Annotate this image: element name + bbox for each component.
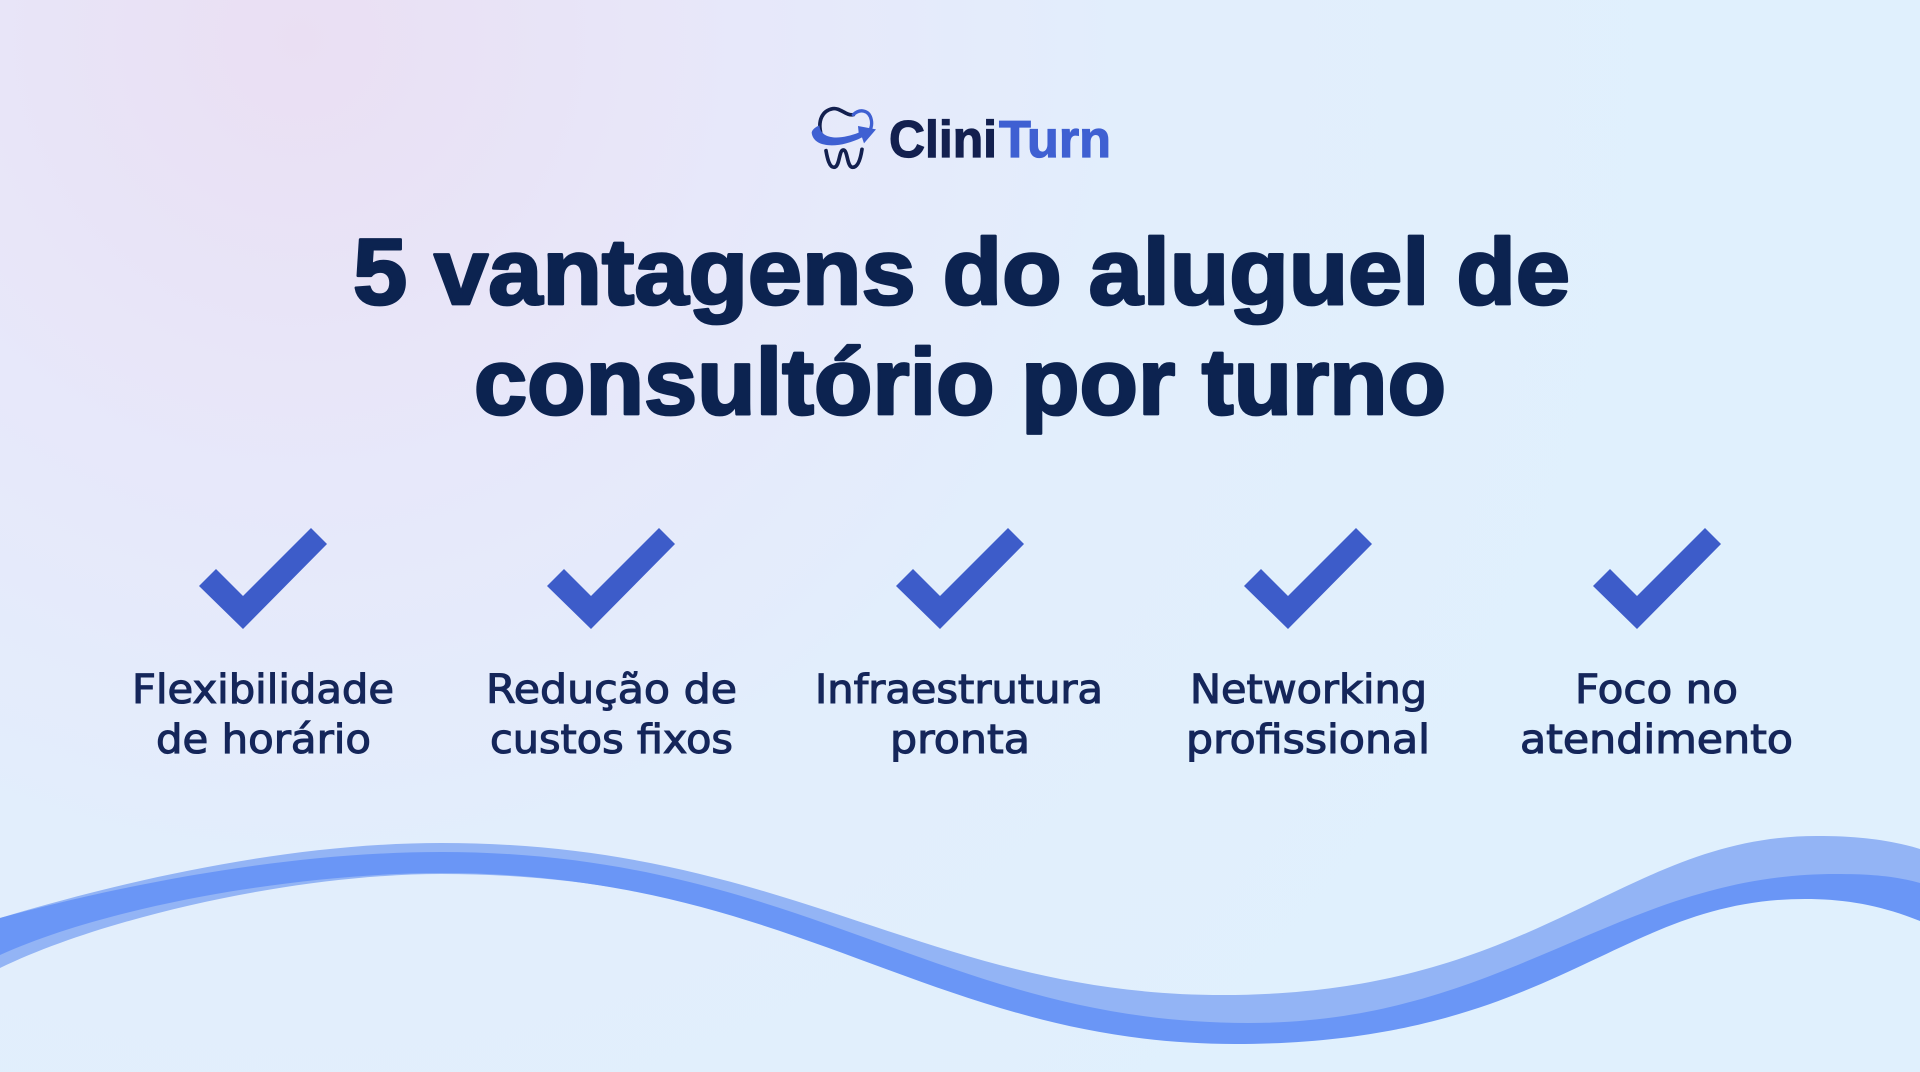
label: profissional [1186,717,1430,763]
label: atendimento [1520,717,1793,763]
label [1520,667,1793,763]
label: Networking [1190,667,1427,713]
title: consultório por turno [474,329,1446,434]
label [815,667,1103,763]
label [1186,667,1430,763]
wave: light ribbon [0,836,1920,1033]
item: Networking profissional [1186,528,1430,763]
logo: CliniTurn [812,109,1111,169]
advantage list [132,528,1793,763]
label: Flexibilidade [132,667,394,713]
item: Infraestrutura pronta [815,528,1103,763]
label: Redução de [486,667,737,713]
wordmark: Clini [889,111,997,169]
decorative wave ribbons [0,836,1920,1044]
icon: check [199,528,327,629]
icon: check [547,528,675,629]
icon: check [1593,528,1721,629]
label: custos fixos [490,717,733,763]
item: Flexibilidade de horário [132,528,394,763]
title: 5 vantagens do aluguel de [353,219,1570,324]
label: Infraestrutura [815,667,1103,713]
label: pronta [890,717,1030,763]
icon: check [1244,528,1372,629]
wave: dark ribbon [0,852,1920,1044]
icon: tooth with arrow [812,109,876,167]
label [486,667,737,763]
icon: check [896,528,1024,629]
label: de horário [156,717,371,763]
label: Foco no [1575,667,1738,713]
item: Foco no atendimento [1520,528,1793,763]
wordmark: Turn [999,111,1111,169]
title [353,219,1570,434]
item: Redução de custos fixos [486,528,737,763]
wordmark [889,111,1111,169]
label [132,667,394,763]
